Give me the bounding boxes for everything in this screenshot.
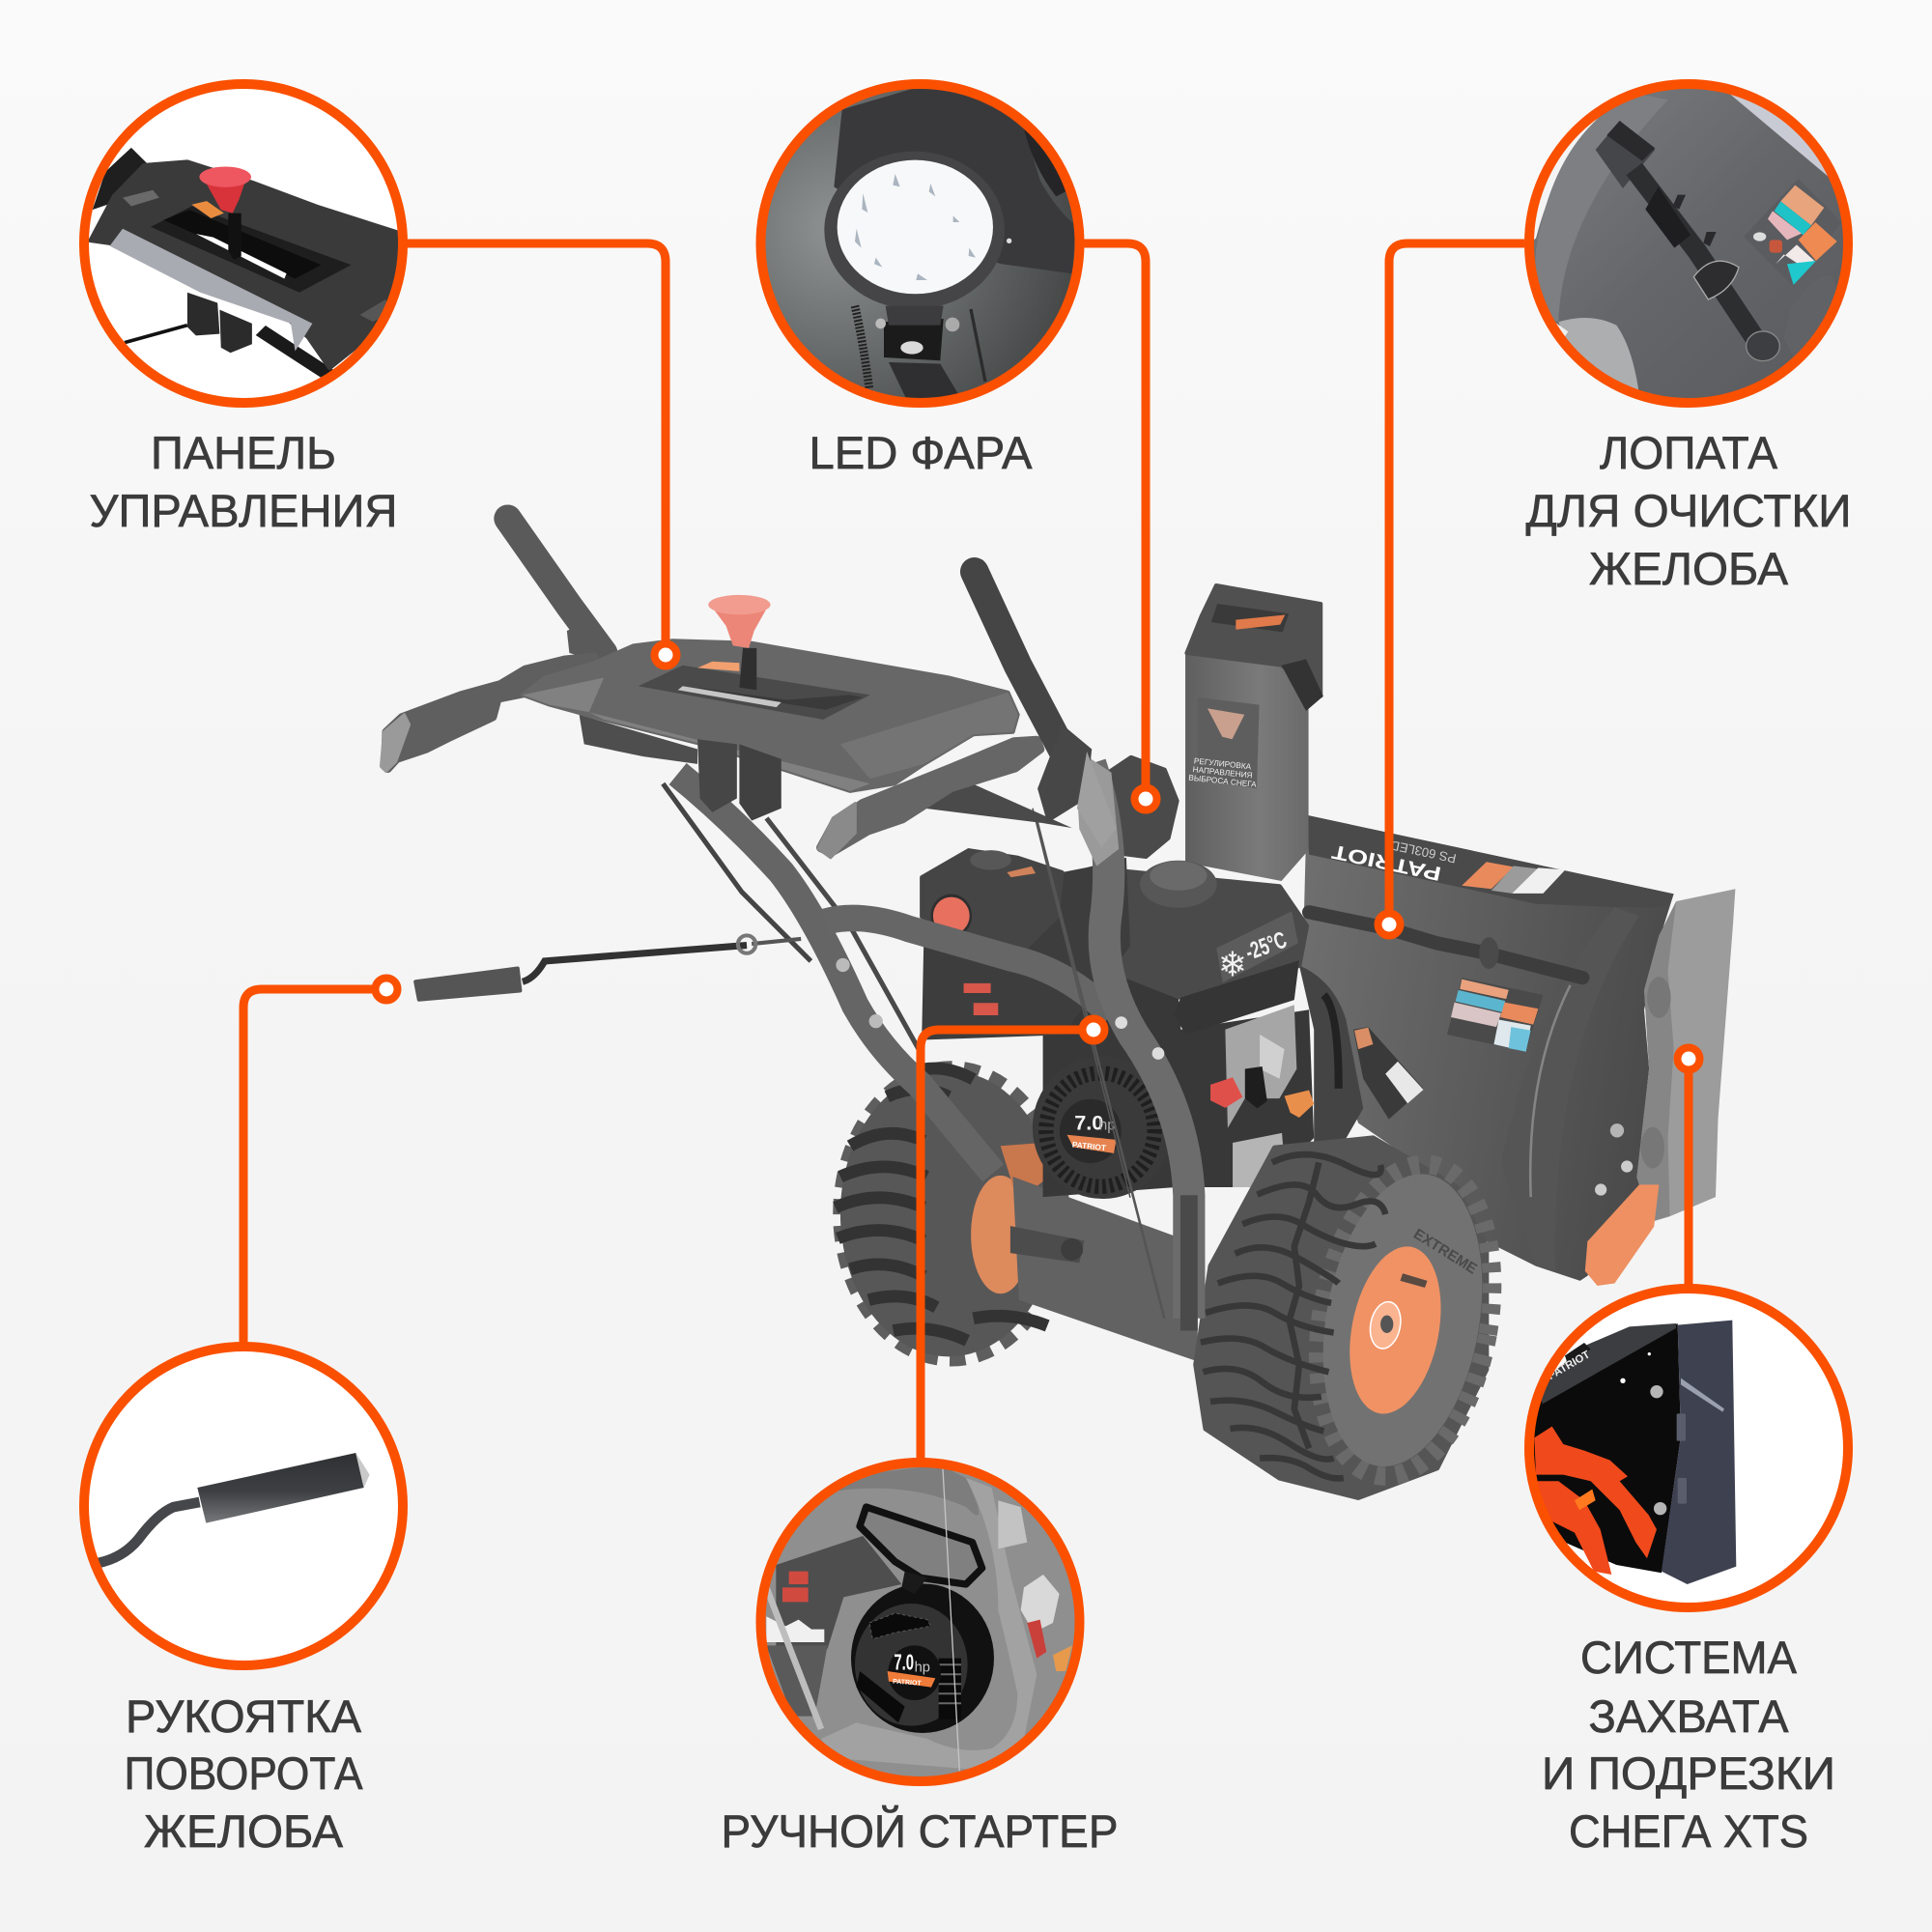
warning sticker — [1744, 179, 1842, 287]
engine block: -25°C — [1242, 927, 1291, 966]
label: shovel: ДЛЯ ОЧИСТКИ — [1526, 485, 1851, 536]
panel: XTS snow cutting system callout — [1524, 1285, 1853, 1857]
label: control panel: УПРАВЛЕНИЯ — [89, 485, 398, 536]
leader lines — [243, 243, 1700, 1459]
detail circle: manual starter: hp — [915, 1661, 930, 1676]
engine block: ❄ — [1218, 946, 1247, 984]
ring — [84, 1347, 403, 1665]
orange choke lever — [1285, 1090, 1314, 1118]
left clutch lever — [508, 519, 604, 653]
label: rotation handle — [124, 1690, 363, 1857]
label: XTS system — [1542, 1632, 1835, 1857]
label: rotation handle: РУКОЯТКА — [126, 1690, 362, 1742]
recoil starter housing: 7.0 — [1074, 1111, 1103, 1135]
tank sticker — [1216, 911, 1298, 982]
label: rotation handle: ПОВОРОТА — [124, 1747, 363, 1799]
panel: chute rotation handle callout — [79, 1343, 408, 1857]
red shift knob — [708, 595, 771, 648]
detail circle: XTS system: PATRIOT — [1546, 1349, 1592, 1382]
label: rotation handle: ЖЕЛОБА — [144, 1805, 344, 1857]
ring — [1529, 1289, 1848, 1607]
rear left wheel — [836, 1068, 1065, 1356]
detail circle: rotation handle — [89, 1351, 398, 1661]
control console — [381, 519, 1117, 1000]
right hand grip — [909, 769, 1072, 828]
housing stripes — [1462, 862, 1514, 889]
side cutter plate — [1636, 889, 1735, 1222]
label: shovel: ЛОПАТА — [1600, 427, 1778, 478]
label: XTS system: СНЕГА XTS — [1569, 1805, 1808, 1857]
red fuel valve — [1210, 1077, 1242, 1108]
chute label text: РЕГУЛИРОВКА — [1193, 755, 1252, 772]
detail circle: manual starter — [765, 1467, 1074, 1776]
recoil starter housing: hp — [1099, 1118, 1116, 1134]
label: LED headlight: LED ФАРА — [810, 427, 1033, 478]
detail circle: XTS system — [1534, 1293, 1843, 1603]
detail circle: LED headlight — [765, 89, 1074, 398]
pull handle — [860, 1507, 982, 1584]
warning sticker — [1447, 978, 1543, 1052]
ring — [761, 1463, 1080, 1781]
shift stem — [739, 648, 756, 690]
recoil starter housing — [1033, 1056, 1173, 1199]
right clutch lever — [975, 572, 1067, 759]
label: XTS system: И ПОДРЕЗКИ — [1542, 1747, 1835, 1799]
shift slot — [639, 666, 870, 720]
label: XTS system: СИСТЕМА — [1580, 1632, 1798, 1683]
label: shovel: ЖЕЛОБА — [1589, 543, 1789, 594]
front right wheel with tread: EXTREME — [1410, 1226, 1480, 1278]
label: XTS system: ЗАХВАТА — [1588, 1690, 1789, 1742]
label: manual starter: РУЧНОЙ СТАРТЕР — [721, 1805, 1119, 1857]
starter badge text: 7.0 — [894, 1650, 914, 1675]
brackets — [697, 739, 737, 812]
front right wheel with tread — [1196, 1138, 1515, 1497]
panel: chute cleaning shovel callout — [1520, 74, 1858, 594]
recoil starter housing: PATRIOT — [1071, 1140, 1106, 1152]
left hand grip — [384, 657, 596, 769]
starter cover — [851, 1583, 994, 1733]
fuel tank — [1063, 871, 1307, 998]
red fuel cap — [933, 897, 970, 934]
shovel head — [1596, 121, 1655, 188]
headlight — [1094, 757, 1177, 856]
shovel rod — [1634, 169, 1761, 348]
chute cleaning shovel — [1309, 912, 1582, 978]
panel: LED headlight callout — [753, 77, 1089, 478]
orange skid shoe — [1585, 1184, 1659, 1286]
panel: control panel callout — [77, 77, 410, 536]
orange auger — [1534, 1427, 1657, 1558]
right handle column — [1035, 748, 1189, 1331]
orange wheel rim — [1337, 1238, 1454, 1422]
detail circle: shovel — [1534, 89, 1843, 398]
discharge chute — [1185, 585, 1323, 881]
handle tubes and control cables — [663, 774, 1130, 1198]
chute rotation handle grip — [415, 969, 520, 1000]
detail circle: manual starter: PATRIOT — [893, 1679, 923, 1688]
engine block — [1043, 861, 1363, 1197]
chute label text: ВЫБРОСА СНЕГА — [1188, 773, 1258, 789]
chute rotation handle rod — [523, 946, 747, 981]
model sticker — [1353, 1027, 1423, 1120]
engine frame base — [1010, 1177, 1198, 1361]
chute label text: НАПРАВЛЕНИЯ — [1192, 764, 1253, 781]
ring — [84, 84, 403, 403]
housing brand text: PATRIOT — [1329, 839, 1443, 884]
left fuel tank and cross bar — [922, 850, 1130, 1040]
auger housing — [1299, 815, 1735, 1286]
label: shovel — [1526, 427, 1851, 594]
console panel — [580, 715, 697, 764]
chute label text — [1188, 755, 1258, 789]
auger housing: PS 603LED — [1389, 838, 1458, 866]
ring — [1529, 84, 1848, 403]
snow blower illustration — [381, 519, 1735, 1497]
label: control panel: ПАНЕЛЬ — [151, 427, 336, 478]
panel: manual starter callout — [721, 1459, 1119, 1857]
detail circle: control panel — [89, 148, 398, 377]
label: control panel — [89, 427, 398, 536]
orange speed label — [697, 662, 739, 671]
ring — [761, 84, 1080, 403]
